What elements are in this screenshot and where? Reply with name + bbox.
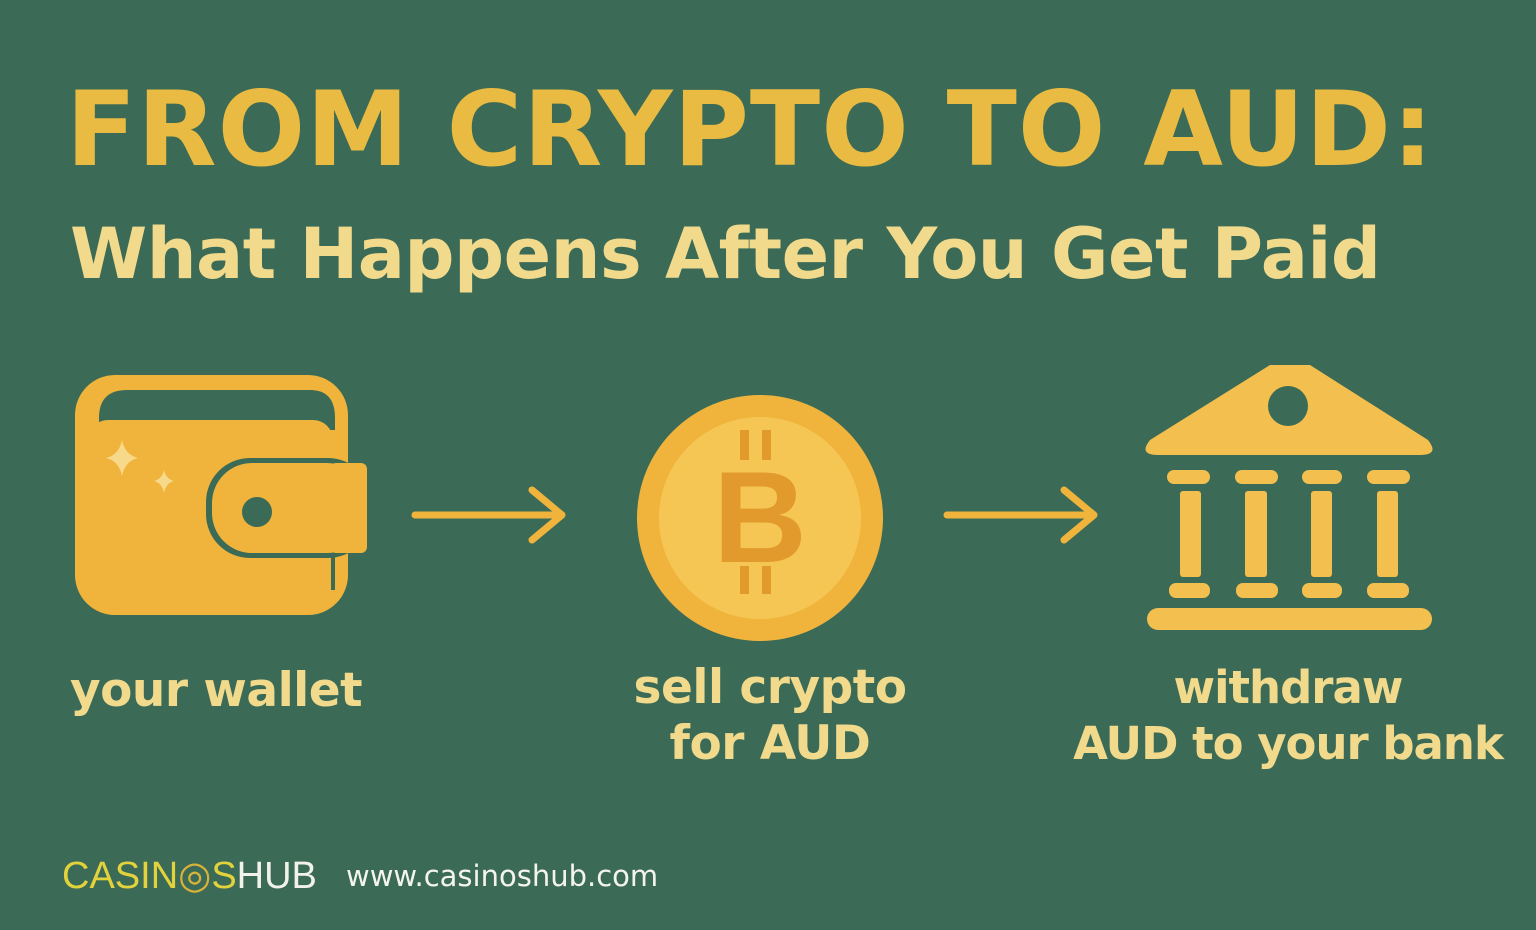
subtitle: What Happens After You Get Paid: [70, 213, 1381, 295]
label: your wallet: your wallet: [70, 663, 362, 718]
title: FROM CRYPTO TO AUD:: [66, 70, 1434, 190]
arrow 2: [944, 486, 1098, 544]
label: sell crypto for AUD: sell crypto: [633, 660, 906, 715]
label: withdraw AUD to your bank: [1073, 661, 1505, 770]
label: sell crypto for AUD: [633, 660, 906, 771]
icon: bitcoin coin: B: [713, 444, 807, 590]
label: withdraw AUD to your bank: withdraw: [1174, 661, 1402, 714]
logo: CASIN◎SHUB: [62, 855, 317, 897]
arrow 1: [412, 486, 566, 544]
website url: www.casinoshub.com: [346, 859, 658, 893]
label: sell crypto for AUD: for AUD: [670, 716, 870, 771]
icon: bitcoin coin: [637, 395, 883, 641]
label: withdraw AUD to your bank: AUD to your bank: [1073, 717, 1503, 770]
